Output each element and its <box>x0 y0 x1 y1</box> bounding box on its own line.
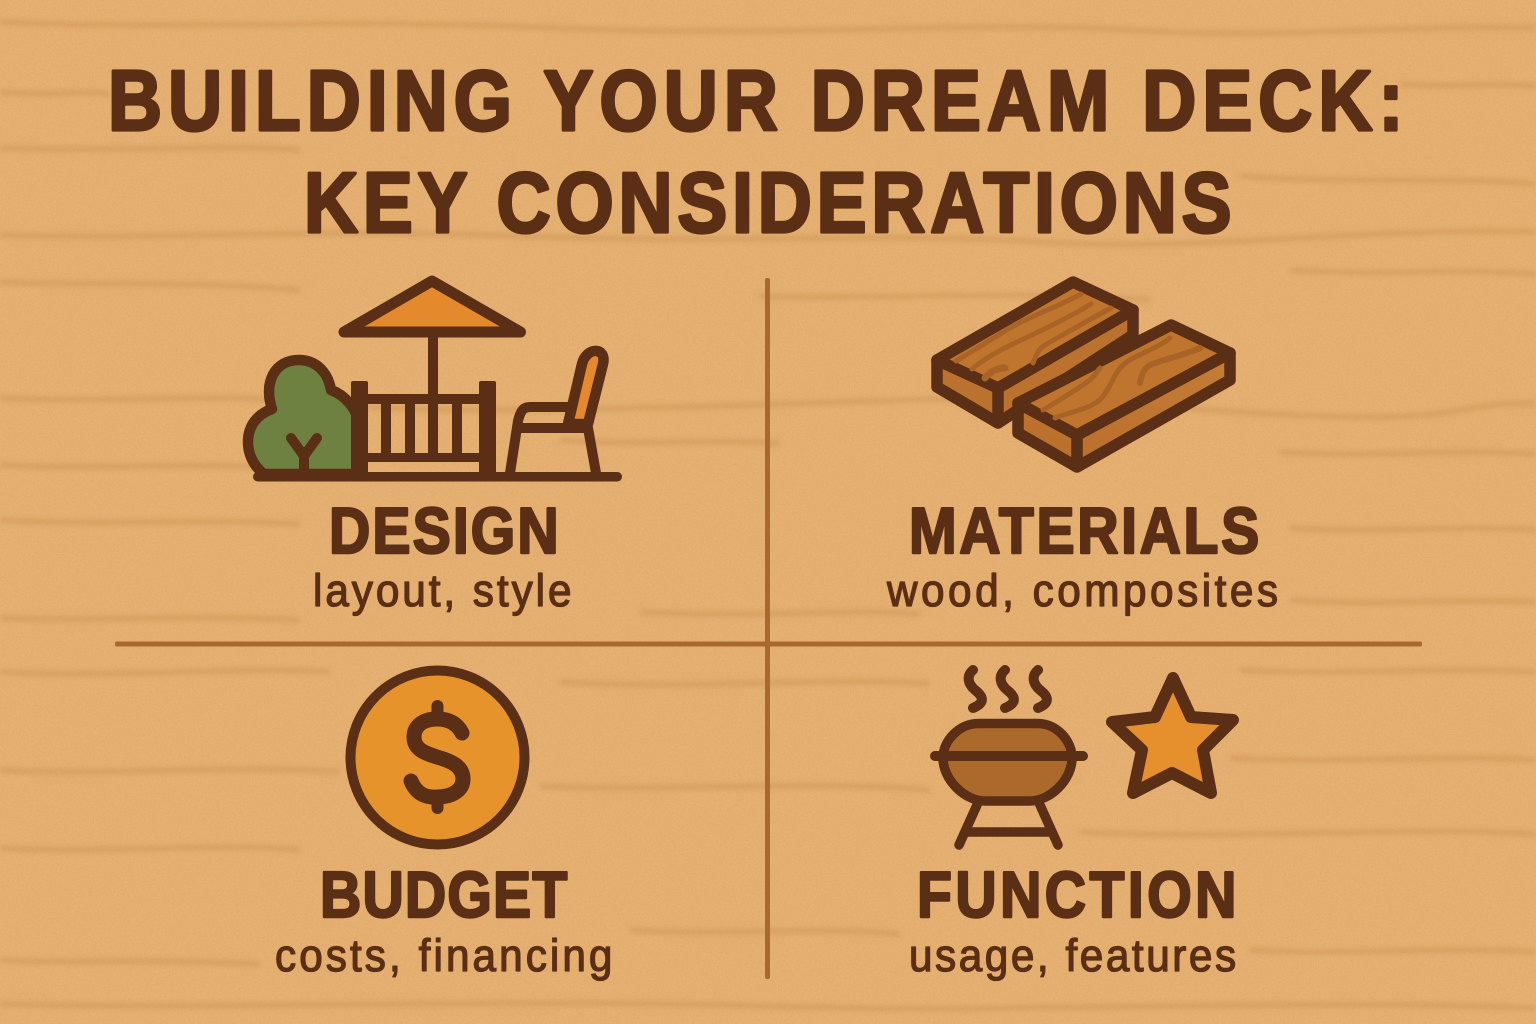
ground line <box>253 472 622 482</box>
panel: budget <box>275 670 612 981</box>
panel: design <box>248 281 622 616</box>
title: KEY CONSIDERATIONS <box>304 156 1232 250</box>
panel: function <box>909 670 1236 981</box>
plank 2 <box>1018 325 1230 467</box>
horizontal divider <box>115 642 1422 646</box>
heading: design: DESIGN <box>329 495 559 567</box>
subtext: materials: wood, composites <box>886 566 1278 616</box>
railing <box>351 381 496 478</box>
title: BUILDING YOUR DREAM DECK: <box>108 54 1403 148</box>
grill rim <box>935 751 1083 761</box>
grill legs <box>959 805 1058 845</box>
icon: grill with smoke <box>935 670 1083 845</box>
heading: materials: MATERIALS <box>909 495 1259 567</box>
subtext: budget: costs, financing <box>275 931 612 981</box>
heading: budget: BUDGET <box>320 859 567 931</box>
subtext: function: usage, features <box>909 931 1236 981</box>
icon: wood planks <box>937 282 1230 467</box>
icon: star <box>1112 678 1233 793</box>
icon: dollar coin <box>350 670 524 844</box>
chair <box>510 351 604 473</box>
umbrella <box>344 281 520 398</box>
title <box>108 54 1403 250</box>
panel: materials <box>886 282 1278 616</box>
icon: patio with umbrella, railing, shrub and chair <box>248 281 622 482</box>
smoke <box>969 670 1047 708</box>
grill body <box>943 724 1072 801</box>
vertical divider <box>765 278 770 979</box>
shrub <box>248 360 360 476</box>
subtext: design: layout, style <box>313 566 572 616</box>
plank 1 <box>937 282 1133 423</box>
heading: function: FUNCTION <box>917 859 1236 931</box>
